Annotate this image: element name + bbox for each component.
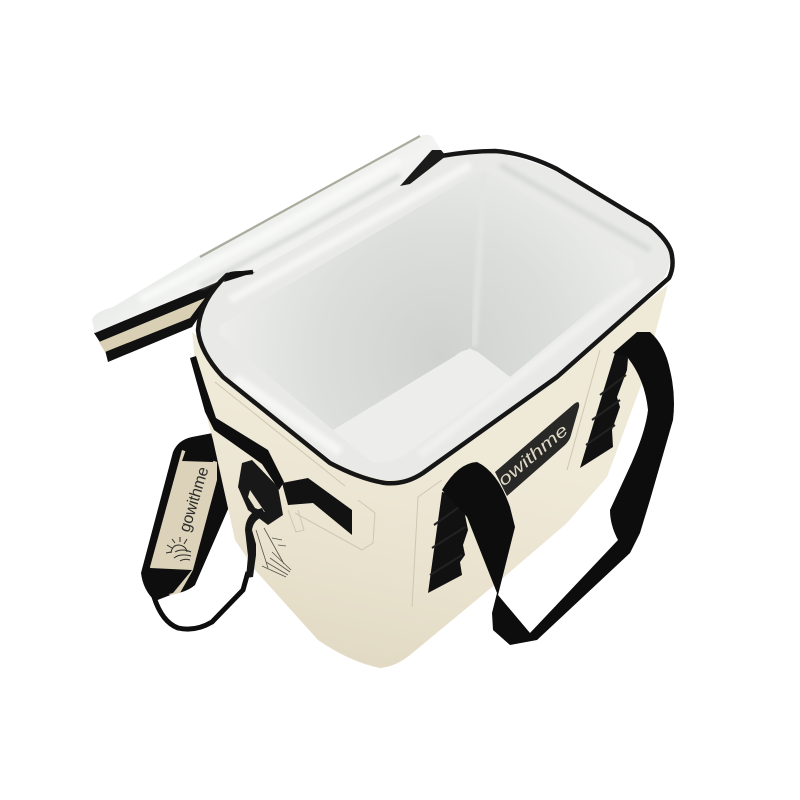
interior floor — [333, 350, 510, 462]
carry handle strap — [442, 332, 674, 645]
badge wordmark: gowithme — [485, 421, 572, 498]
brand badge — [485, 402, 579, 498]
carabiner — [245, 508, 266, 578]
seam lines — [215, 350, 600, 607]
rim zipper — [198, 151, 673, 483]
lid zipper pull — [400, 150, 446, 186]
interior walls — [219, 170, 635, 430]
cooler body — [192, 285, 668, 668]
shoulder strap pad — [141, 432, 232, 601]
carry handle webbing loops — [428, 353, 628, 593]
lid lining — [92, 135, 441, 333]
lid zipper end — [224, 271, 255, 282]
lid — [92, 135, 441, 362]
thin strap loop — [154, 572, 248, 629]
interior lining folds — [230, 165, 650, 455]
side logo on body — [256, 528, 291, 577]
side strap — [190, 356, 352, 578]
inner corner crease — [474, 172, 484, 346]
buckle — [238, 460, 283, 525]
interior lining — [200, 153, 670, 480]
lid side edge — [94, 278, 225, 362]
pad wordmark: gowithme — [177, 465, 212, 534]
pad sun logo — [166, 537, 191, 561]
